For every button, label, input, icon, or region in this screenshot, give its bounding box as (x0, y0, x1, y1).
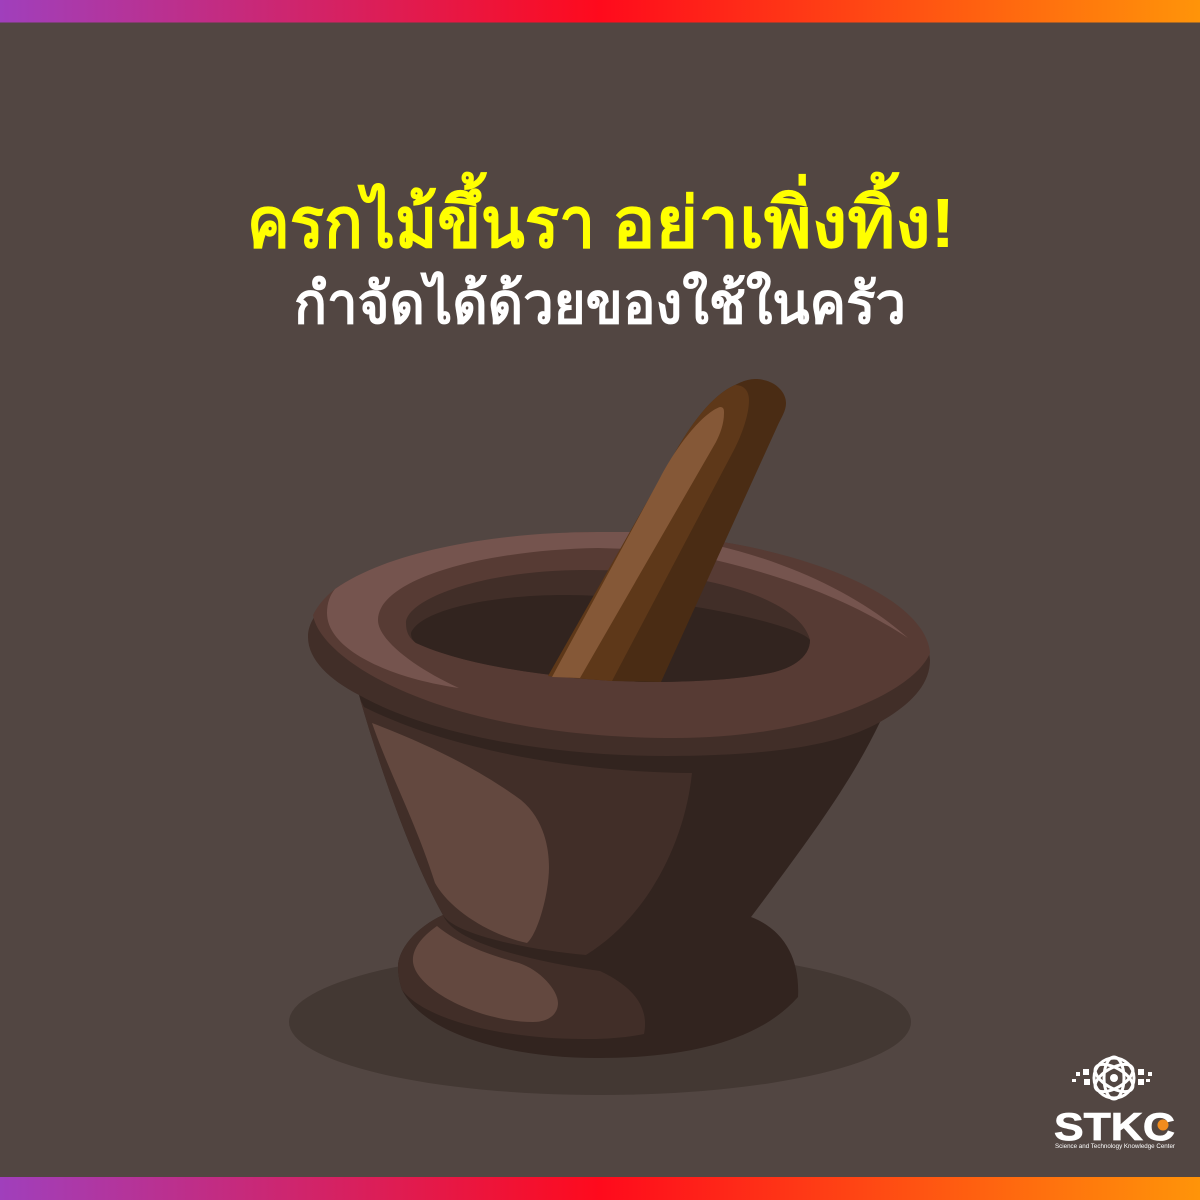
logo pixel dots (1072, 1069, 1152, 1085)
bottom gradient bar (0, 1177, 1200, 1200)
top gradient bar (0, 0, 1200, 22)
pestle highlight (552, 407, 724, 678)
ground shadow (289, 949, 911, 1095)
rim top face (313, 532, 930, 738)
title: อย่าเพิ่งทิ้ง! (612, 171, 955, 262)
logo wordmark: STKC (1054, 1106, 1175, 1149)
title (247, 171, 955, 262)
title: ครกไม้ขึ้นรา (247, 171, 595, 262)
subtitle: กำจัดได้ด้วยของใช้ในครัว (294, 270, 906, 336)
logo orange dot (1158, 1120, 1168, 1130)
mortar foot highlight (413, 926, 558, 1022)
inner wall (406, 570, 810, 682)
mortar body highlight (372, 723, 549, 943)
rim highlight right (715, 545, 908, 638)
mortar body lit side (360, 699, 692, 955)
inner hole (411, 595, 810, 682)
rim highlight left (327, 532, 640, 688)
illustration: mortar and pestle (308, 379, 930, 1058)
pestle mid tone (548, 385, 749, 681)
logo atom icon (1091, 1057, 1137, 1099)
mortar base and body shadow side (359, 695, 880, 1058)
STKC logo (1054, 1057, 1176, 1150)
pestle dark side (548, 379, 786, 682)
rim underside (308, 532, 930, 756)
logo tagline: Science and Technology Knowledge Center (1055, 1143, 1176, 1150)
mortar foot lit side (398, 915, 645, 1039)
